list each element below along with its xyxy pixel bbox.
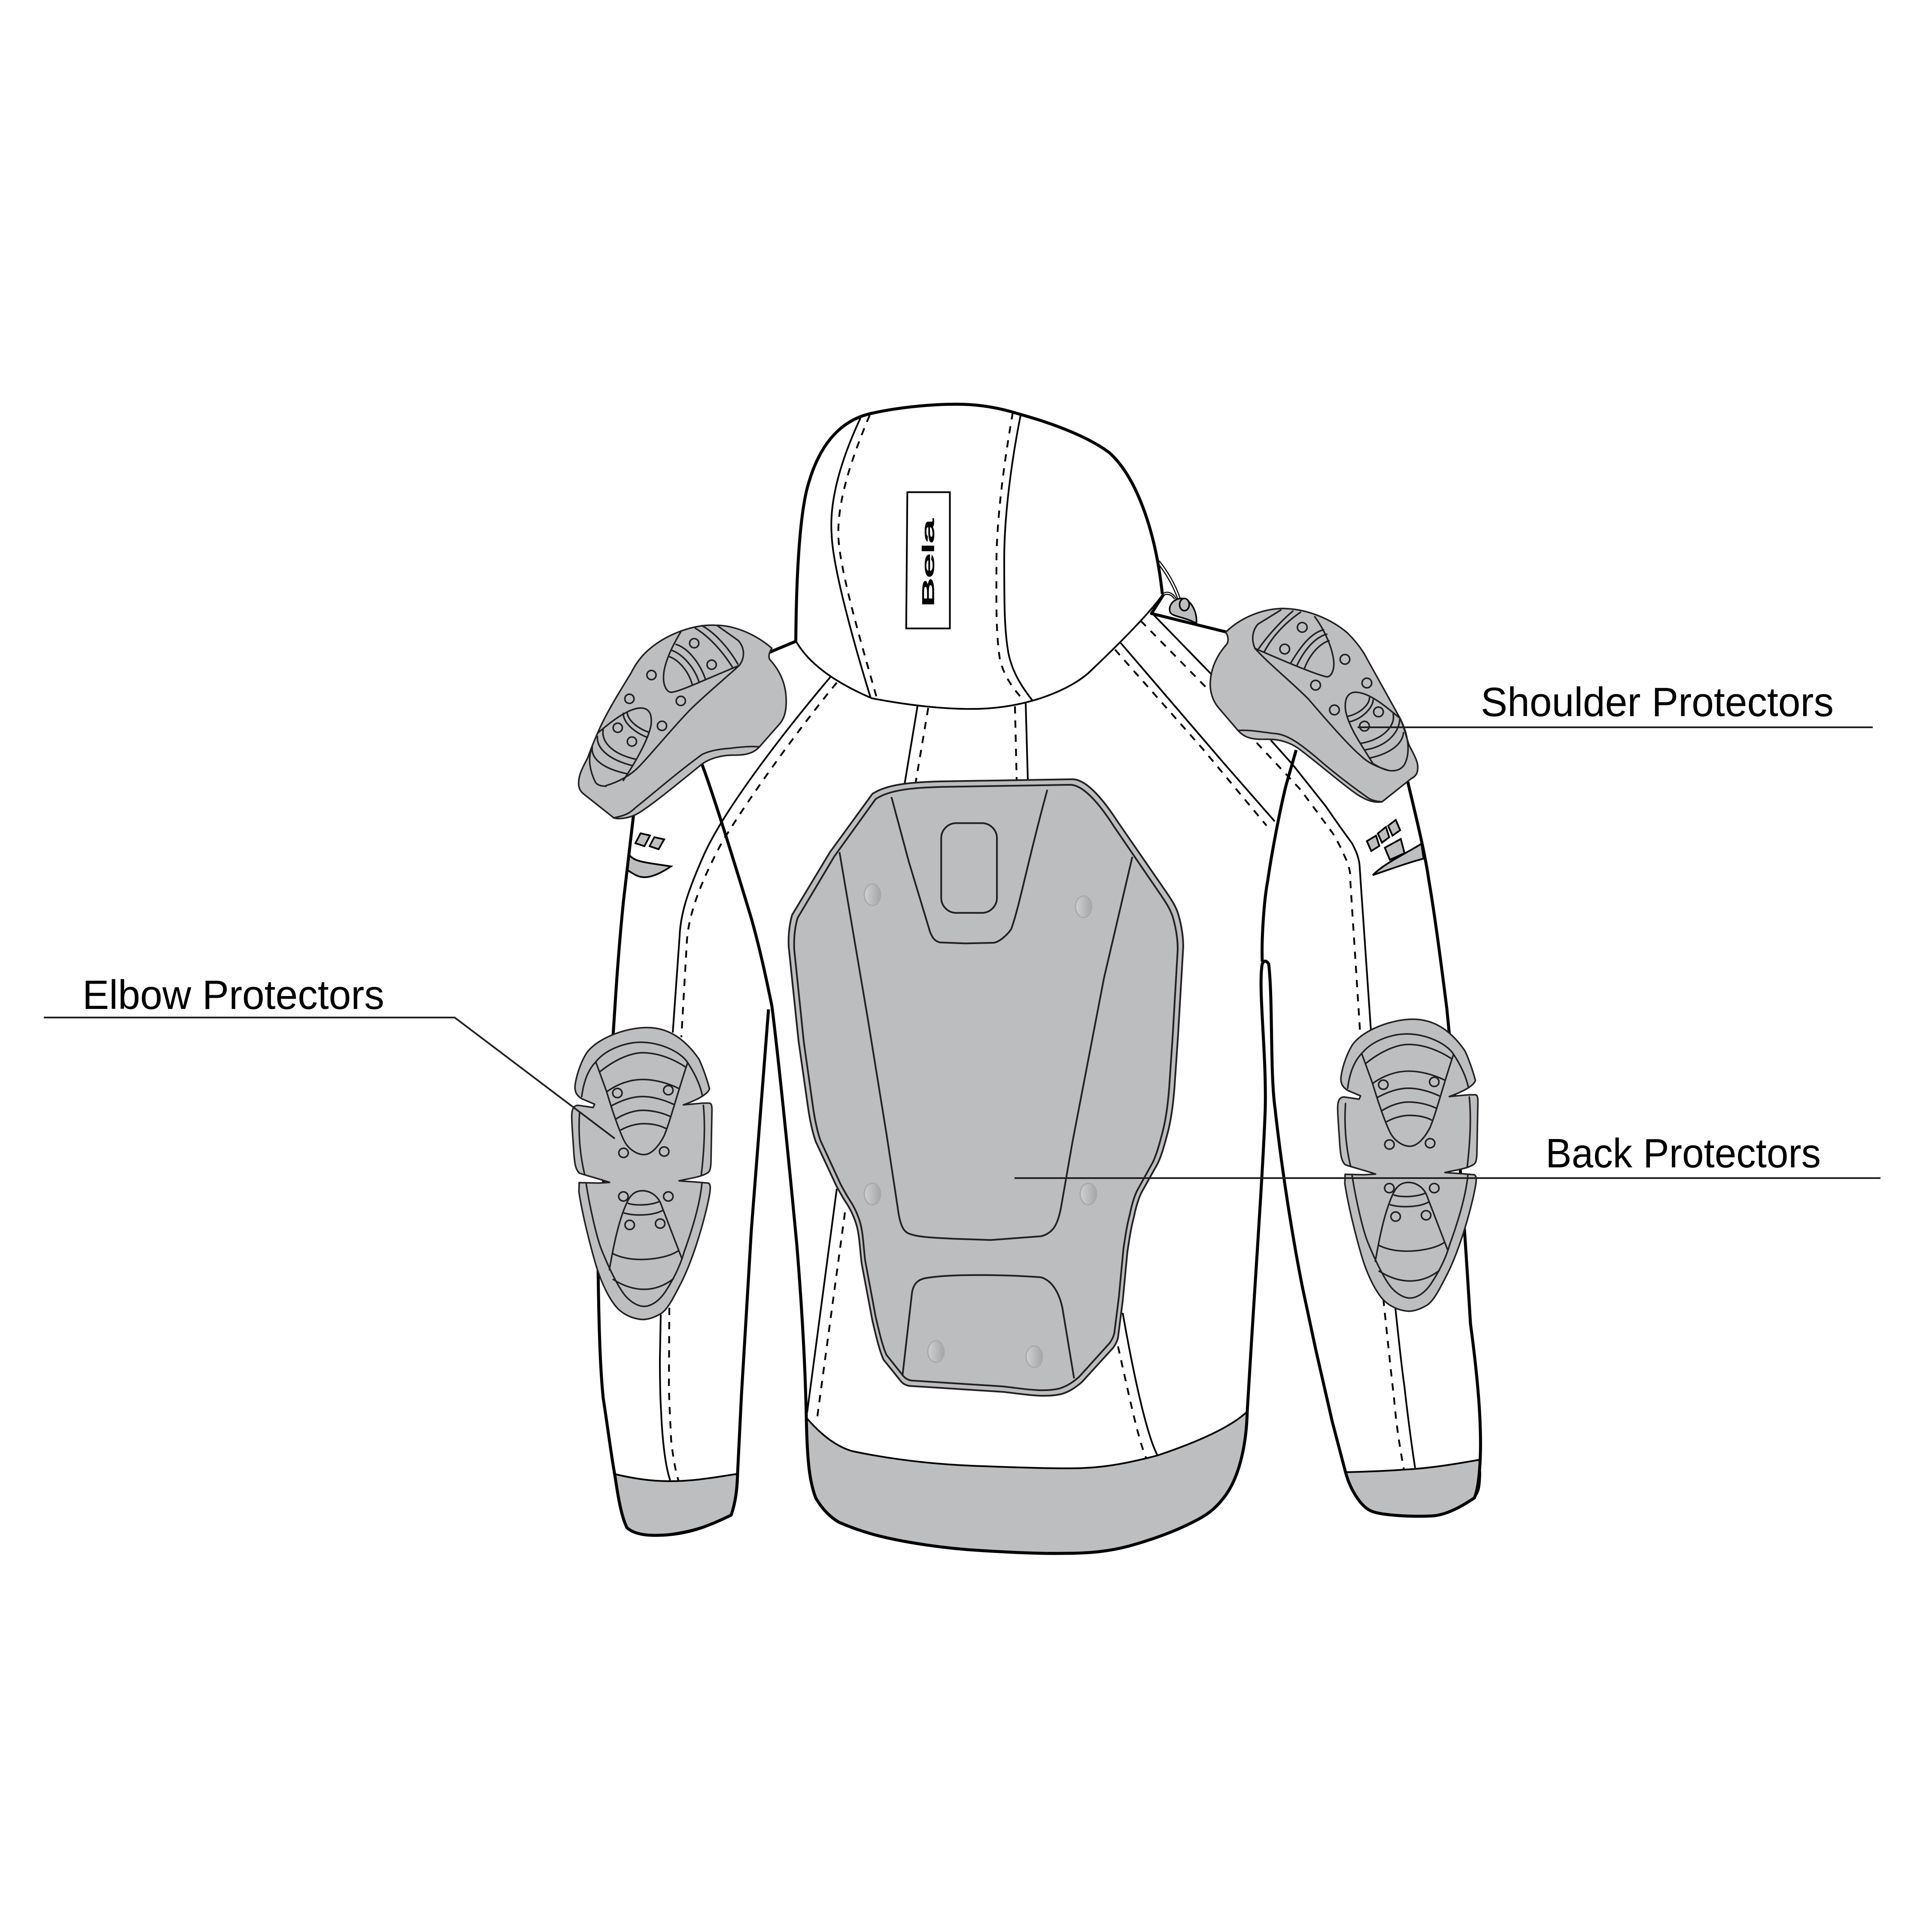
- collar seam right: [1151, 595, 1226, 632]
- label: back protectors: Back Protectors: [1546, 1130, 1821, 1176]
- right shoulder protector: [1210, 608, 1418, 802]
- torso right side outline: [1247, 782, 1480, 1516]
- hood: [796, 404, 1163, 709]
- right elbow protector: [1338, 1019, 1478, 1311]
- back protector panels: [839, 790, 1132, 1240]
- rivets: [864, 884, 1097, 1367]
- left shoulder protector: [579, 625, 786, 819]
- brand label: Bela: [920, 518, 938, 607]
- label: elbow protectors: Elbow Protectors: [82, 972, 384, 1018]
- lower panel: [902, 1275, 1074, 1378]
- left sleeve outline: [598, 814, 769, 1535]
- right lower sleeve seam: [1395, 1308, 1415, 1468]
- left lower sleeve seam: [660, 1315, 670, 1480]
- left elbow protector: [572, 1027, 712, 1319]
- hood toggle: [1159, 561, 1197, 623]
- right sleeve logo: [1367, 820, 1424, 875]
- back panel seams: [807, 1189, 1157, 1458]
- back protector shell: [789, 779, 1183, 1396]
- label: elbow protectors: [44, 972, 615, 1139]
- label: shoulder protectors: Shoulder Protectors: [1481, 679, 1834, 725]
- neck seams: [905, 703, 1028, 784]
- jacket illustration: [598, 404, 1480, 1553]
- collar seam left: [770, 641, 796, 652]
- left raglan seam: [673, 677, 830, 1033]
- right cuff: [1346, 1460, 1480, 1516]
- hem band: [806, 1412, 1247, 1553]
- left cuff: [614, 1474, 737, 1535]
- back protector inner rim: [794, 785, 1178, 1390]
- left sleeve logo: [628, 833, 671, 877]
- torso left side outline: [702, 764, 1247, 1553]
- hood logo patch: [906, 492, 950, 629]
- back protector: [789, 779, 1183, 1396]
- right raglan seams: [1152, 614, 1371, 1030]
- right sleeve inner outline: [1262, 750, 1296, 962]
